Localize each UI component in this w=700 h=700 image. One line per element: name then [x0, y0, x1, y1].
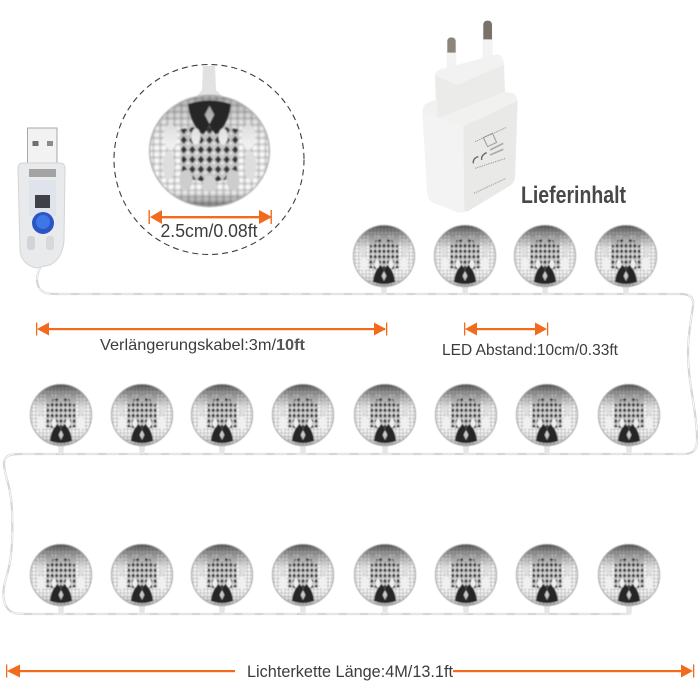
icon: USB controller — [18, 128, 65, 268]
dimension arrow: LED spacing — [464, 322, 548, 336]
adapter body — [422, 92, 518, 213]
adapter pins — [447, 21, 493, 72]
bulbs: third row — [30, 544, 660, 614]
USB blue button — [32, 212, 54, 234]
icon: big silver bulb — [149, 95, 270, 207]
wire: light string cable — [3, 268, 697, 614]
label: total string length: Lichterkette Länge:4M/13.1ft — [247, 662, 453, 681]
label: bulb size: 2.5cm/0.08ft — [160, 220, 258, 241]
dimension arrow: extension cable — [36, 322, 387, 336]
adapter markings — [473, 127, 507, 193]
USB chip — [35, 195, 50, 208]
bulbs: second row — [30, 384, 660, 454]
icon: EU power adapter — [422, 21, 518, 213]
bulbs: first row — [353, 225, 657, 295]
label: LED spacing: LED Abstand:10cm/0.33ft — [442, 342, 619, 359]
big bulb socket — [197, 66, 222, 96]
USB metal plug — [28, 128, 57, 165]
USB translucent housing — [18, 163, 65, 268]
label: extension cable length: Verlängerungskabel:3m/10ft — [100, 337, 306, 354]
dimension arrow: bulb width — [148, 210, 272, 224]
dimension arrow: total string length — [6, 664, 694, 678]
callout: bulb diameter detail — [114, 64, 304, 254]
adapter top block — [435, 54, 505, 120]
label: Lieferinhalt: Lieferinhalt — [521, 182, 626, 209]
